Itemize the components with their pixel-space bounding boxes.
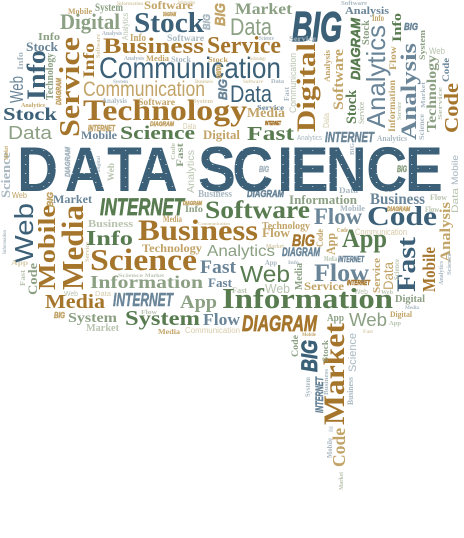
word cloud: bottom left: Flow [203, 310, 241, 329]
word cloud: bottom right: INTERNET [347, 280, 370, 287]
word cloud: bottom left: Information [90, 272, 203, 292]
word cloud: top left: Mobile [81, 128, 118, 142]
word: BIG vertical: BIG [297, 340, 322, 372]
small words between the title letters [20, 143, 407, 193]
word cloud: bottom right: Market [266, 244, 284, 250]
word cloud: top right: Service [397, 102, 403, 120]
small words between the title letters: DIAGRAM [65, 147, 72, 177]
word: Mobile vertical: Mobile [35, 205, 61, 290]
word cloud: top left: Data [183, 122, 196, 131]
word cloud: bottom right: Mobile [450, 155, 460, 185]
word: App: App [342, 224, 387, 253]
word cloud: speech bubble tail: Science [347, 333, 359, 372]
word cloud: bottom left: App [180, 292, 217, 313]
word cloud: top left: Analysis [124, 56, 145, 62]
word cloud: bottom right: Mobile [340, 204, 365, 213]
word: Communication large: Communication [99, 52, 281, 85]
word cloud: top left: Service [55, 37, 86, 137]
word: Information: Information [222, 284, 393, 315]
word cloud: bottom left: Web [64, 291, 78, 298]
small words between the title letters: Digital [97, 155, 102, 172]
word cloud: bottom left: Fast [19, 269, 27, 286]
word cloud: bottom right [222, 155, 460, 336]
word cloud: top right: BIG [404, 22, 418, 33]
word cloud: bottom right: Web [381, 290, 394, 296]
word cloud: bottom left: Communication [185, 326, 240, 335]
word cloud: speech bubble tail: Mobile [302, 333, 317, 338]
word: Web: Web [240, 261, 290, 287]
word cloud: bottom left: Fast [208, 275, 233, 290]
word cloud: bottom left: Market [53, 192, 92, 206]
word cloud: top right: Flow [388, 45, 398, 70]
word cloud: bottom left: Business [198, 189, 232, 200]
word cloud: bottom right: Media [324, 255, 337, 263]
word cloud: speech bubble tail: Code [290, 335, 300, 357]
word cloud: bottom left: App [11, 259, 28, 267]
word cloud: top right: Technology [425, 55, 440, 132]
word cloud: top right: Fast [283, 86, 291, 101]
word cloud: bottom right: App [323, 233, 338, 255]
small words between the title letters: BIG [259, 165, 269, 174]
word cloud: top right: Service [438, 86, 444, 120]
word cloud: speech bubble tail: Web [329, 426, 335, 432]
word cloud: bottom right: Digital [395, 294, 425, 305]
word cloud: bottom right: Data [339, 186, 358, 195]
word cloud: top left: DIAGRAM [163, 12, 176, 18]
word cloud: top right: Fast [247, 123, 294, 145]
word cloud: top left: Info [38, 31, 61, 43]
word cloud: bottom right: Analysis [438, 202, 454, 262]
word cloud: top right: Information [387, 80, 397, 132]
word cloud: bottom right: Science [447, 253, 453, 275]
word cloud: speech bubble tail: Mobile [326, 438, 334, 458]
word cloud: top right: Stock [344, 89, 360, 124]
word cloud: speech bubble tail: System [304, 377, 312, 397]
word cloud: bottom right: Technology [262, 220, 310, 232]
word cloud: top left: DIGITAL [217, 64, 223, 78]
word cloud: bottom left: Market [4, 146, 10, 160]
word cloud: top right: Analysis [323, 50, 332, 82]
word cloud: top right: Data [271, 79, 284, 85]
word cloud: top right: DIAGRAM [348, 17, 363, 80]
word cloud: top right: Service [357, 102, 366, 124]
word cloud: bottom left: Business [88, 218, 134, 230]
word cloud: top right: Web [429, 46, 445, 56]
word cloud: bottom left: Market [145, 274, 164, 279]
word cloud: top right: Software [341, 1, 367, 7]
word: Fast vertical: Fast [392, 237, 421, 292]
word: Digital vertical: Digital [292, 43, 321, 132]
word cloud: speech bubble tail: Business [346, 377, 355, 405]
word cloud: bottom right: Media [294, 263, 305, 290]
word cloud: bottom left: Service [85, 242, 91, 262]
word cloud: top left: DIAGRAM [56, 78, 63, 105]
word: Business large: Business [138, 214, 258, 247]
word cloud: top right: Technology [249, 57, 266, 62]
word cloud: bottom right: INTERNET [338, 255, 365, 264]
word cloud: top left: System [95, 0, 123, 14]
word cloud: top left: BIG [216, 79, 230, 100]
word cloud: top left: Web [7, 76, 27, 103]
word cloud: top left: Data [8, 123, 53, 143]
word cloud: bottom right: Web [265, 281, 290, 296]
word: Science: Science [90, 242, 197, 277]
word cloud: top left: Service [207, 33, 281, 59]
word cloud: top left: INTERNET [88, 124, 116, 133]
word cloud: top left: Analysis [102, 97, 127, 105]
word cloud: bottom right: Flow [262, 225, 291, 240]
word cloud: bottom left: Info [185, 204, 204, 214]
word cloud: top right [230, 1, 463, 146]
word cloud: top left: Digital [60, 9, 120, 34]
word cloud: speech bubble tail: Business [324, 368, 330, 395]
word cloud: bottom right: App [265, 259, 277, 267]
word cloud: top left: System [193, 99, 213, 105]
word cloud: bottom right: DIAGRAM [247, 189, 285, 200]
word cloud: bottom right: Service [372, 257, 383, 293]
word cloud: bottom right: Web [354, 289, 368, 296]
word cloud: bottom left: BIG [46, 192, 55, 207]
word cloud: bottom right: Code [315, 229, 325, 247]
word cloud: bottom right: DIAGRAM [387, 207, 411, 213]
word cloud: top left [3, 0, 281, 144]
word cloud: top left: Software [96, 34, 102, 58]
word cloud: bottom right: Data [380, 262, 396, 290]
word: Code vertical: Code [441, 83, 463, 133]
word cloud: top left: Information [117, 2, 143, 7]
small words between the title letters: Info [20, 155, 28, 178]
small words between the title letters: BIG [350, 143, 356, 155]
word: Analysis vertical: Analysis [396, 42, 421, 140]
word cloud: bottom left: BIG [54, 311, 65, 320]
word cloud: top right: Science [259, 36, 274, 42]
word: Flow steel: Flow [314, 260, 369, 287]
word cloud: bottom right: Flow [430, 193, 447, 202]
word cloud: bottom left: System [125, 306, 201, 330]
word cloud: top left: Information [178, 1, 195, 6]
word cloud: bottom right: App [389, 321, 402, 327]
word cloud: bottom right: Information [289, 192, 358, 207]
word cloud: top left: Stock [3, 104, 57, 124]
small words between the title letters: Code [171, 143, 177, 160]
word: Business: Business [103, 33, 205, 58]
word cloud: bottom right: Digital [390, 310, 413, 319]
word cloud: bottom left: Information [3, 230, 8, 254]
word cloud: top left: DIAGRAM [150, 122, 175, 128]
word cloud: bottom right: Data [450, 188, 460, 213]
word cloud: bottom left: Market [86, 322, 119, 334]
word cloud: top right: Code [441, 58, 451, 82]
word cloud: bottom left: Science [118, 274, 144, 279]
word cloud: top left: Info [130, 33, 146, 44]
word cloud: top right: Science [418, 114, 426, 140]
small words between the title letters: Fast [175, 143, 185, 167]
word: BIG brown: BIG [292, 231, 315, 250]
word cloud: top right: Info [372, 13, 384, 23]
word cloud: top right: Service [289, 35, 316, 43]
word cloud: bottom right: Business [370, 191, 425, 208]
word cloud: top left: Stock [26, 39, 59, 54]
word cloud: bottom right: Communication [355, 227, 407, 237]
word cloud: bottom left [0, 146, 310, 336]
word cloud: top left: Software [167, 33, 204, 43]
word cloud: bottom left: Technology [142, 241, 202, 255]
word cloud: bottom right: Media [405, 306, 420, 311]
word cloud: bottom left: Media [158, 328, 181, 336]
word cloud: bottom left: DIAGRAM [183, 201, 203, 207]
word cloud: top left: Communication [83, 78, 205, 101]
word cloud: bottom left: Communication [198, 221, 231, 226]
word cloud: top right: Data [322, 113, 331, 128]
word cloud: top left: BIG [202, 14, 213, 30]
word: Media vertical: Media [55, 204, 90, 290]
word cloud: top left: Analysis [102, 31, 123, 37]
word cloud: top right: Market [235, 1, 293, 18]
word cloud: bottom left: Data [95, 291, 111, 298]
word cloud: top left: Digital [203, 127, 240, 142]
word: Stock: Stock [134, 8, 204, 39]
word cloud: bottom left: Analytics [207, 243, 275, 260]
word cloud: bottom right: DIAGRAM [282, 245, 321, 259]
word cloud: top right: Data [230, 14, 273, 41]
word cloud: top right: Software [331, 49, 347, 110]
word cloud: top right: Analytics [297, 135, 322, 142]
small words between the title letters: Web [106, 163, 116, 181]
word cloud: top left: Media [146, 54, 169, 63]
small words between the title letters: Analytics [186, 150, 197, 193]
word cloud: top right: INTERNET [265, 121, 282, 127]
word cloud: top right: Software [243, 80, 264, 85]
word: INTERNET steel: INTERNET [113, 290, 174, 310]
word cloud: top right: Data [230, 81, 273, 108]
word cloud: bottom right: Web [349, 310, 387, 330]
word cloud: bottom right: Fast [232, 286, 247, 295]
word cloud: bottom right: App [327, 313, 344, 324]
word cloud: top right: Analytics [377, 134, 407, 143]
word cloud: top right: Media [247, 106, 285, 121]
word cloud: top left: Technology [45, 53, 56, 100]
word cloud: top left: Software [138, 97, 175, 107]
small words between the title letters: BIG [397, 164, 407, 174]
word cloud: speech bubble tail [290, 323, 373, 490]
word cloud: speech bubble tail: Fast [363, 330, 373, 335]
word cloud: top left: Analytics [21, 103, 46, 109]
word cloud: top left: Info [81, 43, 98, 78]
word cloud: top left: BIG [212, 3, 229, 26]
word: Mobile vertical: Mobile [419, 247, 439, 292]
word: DIAGRAM brown: DIAGRAM [242, 311, 317, 336]
word: Market vertical: Market [318, 323, 351, 425]
word cloud: top right: Stock [361, 20, 372, 45]
word cloud: top right: Market [421, 82, 427, 108]
word: Code: Code [367, 201, 437, 231]
word cloud: top right: System [418, 30, 427, 60]
word cloud: top right: Communication [288, 53, 298, 113]
word: INTERNET green: INTERNET [100, 194, 186, 221]
word: Flow: Flow [314, 204, 362, 229]
word cloud: top left: Info [16, 52, 25, 70]
word cloud: bottom right: Flow [425, 205, 439, 214]
word cloud: top left: System [113, 80, 129, 85]
word cloud: top left: Business [195, 80, 213, 85]
word cloud: top left: Science [120, 123, 195, 144]
word: Analytics vertical: Analytics [361, 25, 391, 128]
word cloud: top left: Stock [208, 56, 228, 64]
word cloud: bottom left: Web [12, 191, 27, 200]
word cloud: top left: Mobile [68, 7, 92, 16]
word: Technology: Technology [83, 94, 247, 127]
word cloud: bottom right: Analytics [439, 260, 445, 285]
word cloud: top right: Info [389, 13, 404, 42]
word: Info vertical: Info [22, 50, 51, 100]
word cloud: top left: Analytics [121, 13, 130, 40]
word cloud: bottom right: Science [393, 259, 401, 280]
word: Software: Software [205, 197, 310, 224]
word cloud: speech bubble tail: Code [329, 428, 349, 467]
word: BIG: BIG [292, 3, 342, 50]
word cloud: bottom right: Info [288, 261, 300, 266]
word cloud: bottom left: System [68, 311, 117, 326]
word cloud: speech bubble tail: Stock [321, 339, 330, 362]
word cloud: bottom right: Code [337, 228, 348, 234]
word cloud: top left: Stock [171, 55, 192, 64]
word: Media: Media [45, 291, 105, 313]
word cloud: speech bubble tail: Market [339, 472, 345, 490]
word cloud: speech bubble tail: INTERNET [314, 376, 326, 413]
word cloud: top right: Analysis [345, 5, 390, 17]
word: Web vertical: Web [9, 203, 39, 263]
title: DATA SCIENCE: DATA SCIENCE [17, 134, 443, 205]
word cloud: bottom left: Code [25, 263, 40, 295]
word: INTERNET: INTERNET [325, 129, 375, 146]
word: Info: Info [86, 226, 133, 250]
word cloud: bottom left: Flow [141, 310, 158, 316]
word cloud: bottom right: Service [304, 279, 345, 293]
word cloud: bottom left: Media [163, 214, 182, 224]
word cloud: top right: Service [257, 104, 284, 112]
word cloud: bottom left: Fast [200, 257, 237, 278]
